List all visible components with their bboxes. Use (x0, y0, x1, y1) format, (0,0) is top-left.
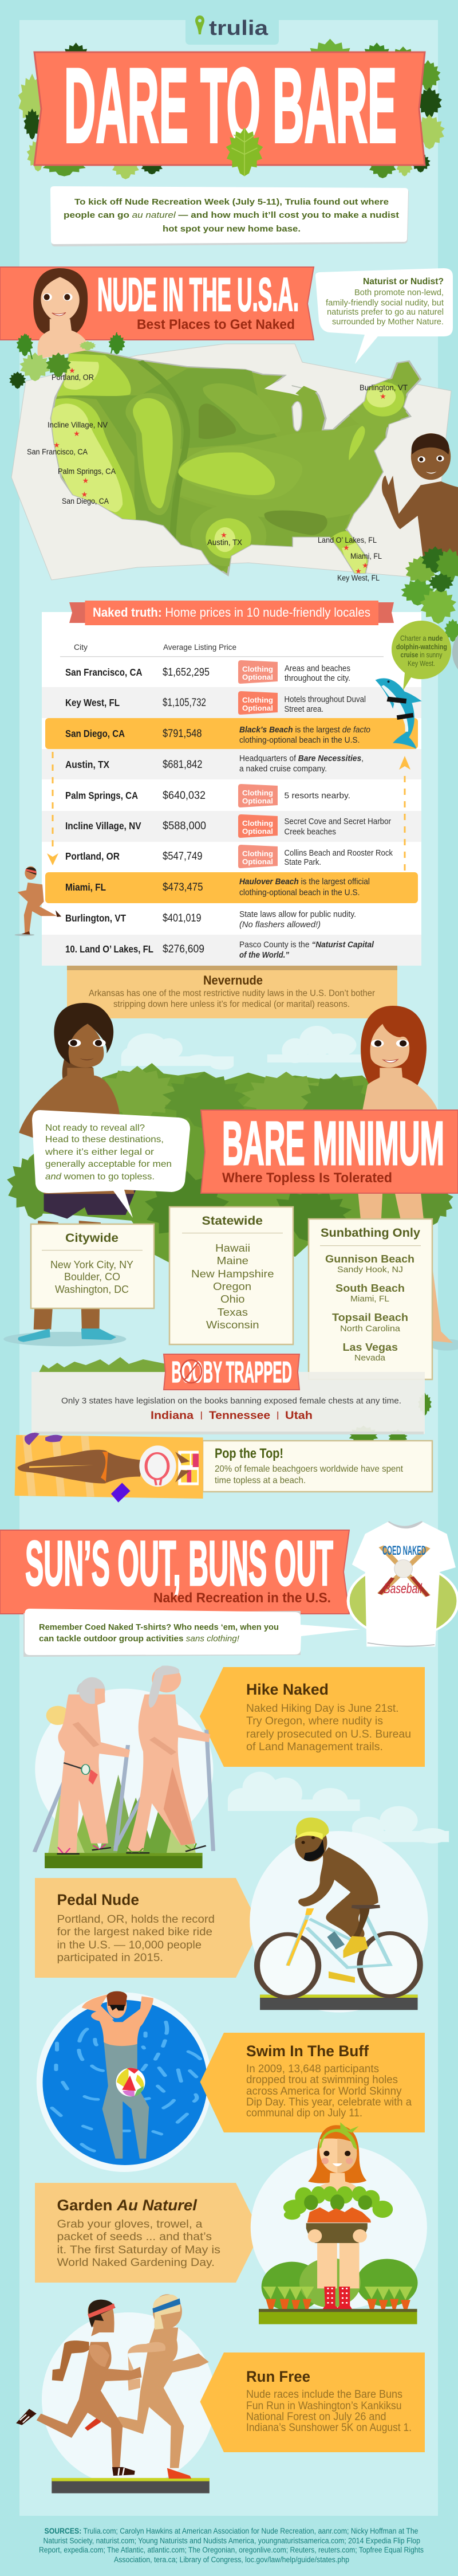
detail column: throughout the city. (285, 674, 350, 683)
speech bubble: dolphin cruise: Key West. (408, 660, 435, 668)
arrow: dashed up (399, 756, 410, 872)
front runner (37, 2342, 141, 2468)
callout: Nevernude: stripping down here unless it’s for medical (or marital) reasons. (113, 999, 350, 1009)
column headers: Average Listing Price (163, 642, 236, 652)
illustration: hikers (34, 1665, 213, 1868)
intro text box: hot spot your new home base. (163, 224, 301, 234)
map labels and stars: Palm Springs, CA (58, 467, 116, 476)
icon: fig leaf (226, 127, 263, 177)
card: Garden Au Naturel: Grab your gloves, trowel, a (57, 2218, 203, 2230)
column headers: City (74, 642, 88, 652)
speech bubble: not ready to reveal all: and women to go topless. (45, 1172, 155, 1182)
illustration: sunbather on towel (15, 1433, 203, 1503)
card: Run Free: National Forest on July 26 and (246, 2411, 386, 2423)
card: Statewide: Statewide (202, 1214, 263, 1228)
clothing optional badges: Optional (242, 704, 273, 712)
card: Run Free: Run Free (246, 2368, 310, 2385)
detail column: State Park. (284, 858, 321, 867)
icon: prohibition sign (181, 1360, 202, 1383)
panel: Booby Trapped: BOOBY TRAPPED (172, 1356, 292, 1389)
title banner (34, 46, 425, 165)
map labels and stars: ★ (355, 567, 362, 575)
clouds (121, 1026, 364, 1070)
title banner leaves (18, 39, 445, 179)
card: Swim In The Buff (200, 2033, 425, 2132)
card: Swim In The Buff: across America for World Skinny (246, 2085, 402, 2097)
detail column: State laws allow for public nudity. (239, 910, 356, 919)
map labels and stars: Austin, TX (207, 538, 242, 547)
speech bubble: coed naked t-shirts: can tackle outdoor group activities sans clothing! (39, 1634, 240, 1644)
character: small runner (15, 866, 61, 936)
greens (283, 2186, 393, 2220)
card: Hike Naked: Naked Hiking Day is June 21st. (246, 1703, 398, 1715)
city and price columns: 10. Land O’ Lakes, FL (65, 943, 153, 955)
clothing optional badges: Optional (242, 827, 273, 836)
card: Pop the Top: 20% of female beachgoers worldwide have spent (215, 1464, 404, 1474)
character: woman with red hair (358, 1006, 458, 1351)
card: Run Free: Indiana’s Sunshower 5K on August 1. (246, 2422, 412, 2434)
card: Garden Au Naturel: Garden Au Naturel (57, 2197, 197, 2214)
card: Statewide: Wisconsin (206, 1319, 259, 1331)
clothing optional badges: Clothing (242, 696, 273, 704)
clothing optional badges: Optional (242, 857, 273, 866)
clothing optional badges: Optional (242, 797, 273, 805)
detail column: clothing-optional beach in the U.S. (239, 888, 360, 897)
card: Garden Au Naturel: World Naked Gardening Day. (57, 2257, 215, 2269)
map labels and stars: ★ (81, 490, 88, 499)
callout: naturist or nudist: naturists prefer to go au naturel (327, 308, 444, 317)
speech bubble: dolphin cruise: cruise in sunny (401, 651, 443, 659)
back runner (108, 2327, 209, 2468)
card: Citywide: Citywide (65, 1232, 119, 1245)
map labels and stars: San Francisco, CA (27, 448, 88, 456)
speech bubble: not ready to reveal all: generally acceptable for men (45, 1159, 172, 1169)
shoulders (315, 2173, 360, 2193)
city and price columns: Key West, FL (65, 697, 120, 708)
beach ball (116, 2068, 145, 2096)
city and price columns (65, 666, 210, 955)
callout: naturist or nudist: surrounded by Mother Nature. (332, 317, 444, 327)
map labels and stars: ★ (220, 531, 227, 539)
sources: Naturist Society, naturist.com; Young Naturists and Nudists America, youngnaturistsamerica.com; 2014 Expedia Flip Flop (44, 2536, 420, 2545)
city and price columns: Palm Springs, CA (65, 790, 138, 801)
card: Statewide (169, 1207, 293, 1344)
legs (317, 2242, 337, 2288)
map labels and stars: Key West, FL (337, 574, 380, 582)
speech bubble: dolphin cruise (392, 621, 458, 691)
subheading: Where Topless Is Tolerated (222, 1170, 392, 1186)
clothing optional badges: Clothing (242, 789, 273, 797)
city and price columns: Austin, TX (65, 759, 109, 770)
card: Garden Au Naturel: packet of seeds ... and that’s (57, 2231, 212, 2243)
section banner: Sun's Out, Buns Out (0, 1528, 349, 1614)
sources (39, 2527, 424, 2564)
city and price columns: $681,842 (163, 759, 203, 771)
map labels and stars: Portland, OR (52, 373, 94, 382)
card: Run Free: Fun Run in Washington’s Kankiksu (246, 2400, 402, 2412)
table: home prices (42, 601, 421, 966)
card: Citywide (31, 1224, 154, 1308)
carrot rows (266, 2299, 410, 2309)
clothing optional badges: Clothing (242, 849, 273, 858)
city and price columns: Miami, FL (65, 881, 106, 893)
scene: clouds and bushes (7, 1026, 453, 1262)
statement: Only 3 states have legislation on the books banning exposed female chests at any time. (61, 1396, 401, 1406)
card: Swim In The Buff: Swim In The Buff (246, 2042, 369, 2060)
intro text box: To kick off Nude Recreation Week (July 5-11), Trulia found out where (74, 197, 389, 207)
intro text box: people can go au naturel — and how much it’ll cost you to make a nudist (64, 210, 399, 220)
card: Sunbathing Only: Topsail Beach (332, 1312, 408, 1323)
detail column: Headquarters of Bare Necessities, (239, 754, 364, 763)
city and price columns: $401,019 (163, 912, 202, 924)
card: Hike Naked: Try Oregon, where nudity is (246, 1715, 383, 1727)
map labels and stars (27, 366, 408, 582)
callout: naturist or nudist: family-friendly social nudity, but (326, 299, 444, 308)
clothing optional badges: Clothing (242, 819, 273, 828)
card: Pop the Top: Pop the Top! (215, 1446, 283, 1461)
basket (306, 2223, 368, 2243)
card: Swim In The Buff: dropped trou at swimming holes (246, 2074, 398, 2086)
detail column: Collins Beach and Rooster Rock (284, 849, 393, 858)
swimmer (102, 2040, 149, 2159)
card: Pedal Nude (35, 1878, 260, 1978)
city and price columns: $473,475 (163, 881, 203, 893)
card: Pedal Nude: participated in 2015. (57, 1952, 163, 1964)
column headers (60, 642, 384, 657)
speech bubble: not ready to reveal all: Head to these destinations, (45, 1135, 164, 1144)
speech bubble: not ready to reveal all: where it’s either legal or (45, 1147, 155, 1157)
wordmark: trulia (209, 16, 269, 40)
map labels and stars: ★ (69, 366, 76, 375)
card: Pedal Nude: in the U.S. — 10,000 people (57, 1939, 202, 1951)
row backgrounds (42, 687, 421, 966)
card: Statewide: Hawaii (215, 1242, 250, 1254)
card: Garden Au Naturel (35, 2183, 260, 2283)
city and price columns: Incline Village, NV (65, 820, 141, 832)
t-shirt lettering (382, 1543, 426, 1597)
panel: Booby Trapped (31, 1354, 432, 1445)
detail column: Street area. (284, 705, 323, 714)
card: Swim In The Buff: Dip Day. This year, celebrate with a (246, 2096, 412, 2108)
card: Run Free: Nude races include the Bare Buns (246, 2389, 402, 2401)
map labels and stars: ★ (53, 441, 60, 449)
detail column: a naked cruise company. (239, 764, 327, 774)
detail column (239, 664, 393, 960)
city and price columns: $791,548 (163, 728, 202, 740)
city and price columns: $276,609 (163, 943, 204, 955)
panel: Booby Trapped: Utah (285, 1410, 313, 1422)
card: Pedal Nude: for the largest naked bike ride (57, 1926, 212, 1938)
character: woman with leaves (9, 268, 125, 389)
speech bubble: not ready to reveal all (32, 1110, 190, 1218)
card: Sunbathing Only: North Carolina (340, 1324, 401, 1334)
clothing optional badges: Optional (242, 673, 273, 681)
section banner: Bare Minimum (201, 1108, 458, 1193)
city and price columns: $547,749 (163, 850, 203, 862)
table ribbon (69, 601, 394, 625)
clothing optional badges: Clothing (242, 665, 273, 673)
detail column: Black’s Beach is the largest de facto (239, 726, 370, 735)
city and price columns: $640,032 (163, 790, 206, 802)
subheading: Naked Recreation in the U.S. (153, 1590, 331, 1606)
callout: naturist or nudist: Naturist or Nudist? (363, 277, 444, 287)
water ripples (52, 2022, 200, 2151)
card: Citywide: Washington, DC (55, 1284, 129, 1295)
illustration: runners (16, 2294, 215, 2493)
callout: Nevernude: Nevernude (203, 973, 263, 987)
character: man waving peace sign (382, 433, 458, 586)
table ribbon: Naked truth: Home prices in 10 nude-friendly locales (93, 605, 370, 620)
clouds near cyclist (228, 1772, 449, 1844)
ribbon (164, 1354, 299, 1390)
map labels and stars: ★ (362, 561, 369, 570)
city and price columns: $1,652,295 (163, 666, 210, 679)
sources: SOURCES: Trulia.com; Carolyn Hawkins at American Association for Nude Recreation, aanr.com; Nicky Hoffman at The (45, 2527, 418, 2535)
section banner: Nude in the U.S.A. (0, 267, 314, 340)
map paper background (11, 344, 451, 580)
city and price columns: $1,105,732 (163, 697, 206, 709)
card: Statewide: Oregon (213, 1281, 251, 1292)
card: Sunbathing Only: South Beach (335, 1283, 405, 1294)
detail column: Secret Cove and Secret Harbor (284, 817, 391, 826)
map labels and stars: ★ (343, 543, 350, 552)
speech bubble: not ready to reveal all: Not ready to reveal all? (45, 1123, 145, 1133)
card: Statewide: New Hampshire (191, 1268, 274, 1280)
detail column: of the World.” (239, 951, 290, 960)
card: Statewide: Maine (216, 1255, 248, 1267)
detail column: (No flashers allowed!) (239, 920, 321, 930)
illustration: floating swimmer in pool (37, 1991, 212, 2172)
illustration: gardener with carrots (251, 2122, 427, 2324)
map labels and stars: ★ (73, 429, 80, 438)
map of the U.S. with contour zones (50, 348, 421, 575)
character: woman with dark hair (3, 1003, 136, 1346)
leaves below panel (349, 1393, 432, 1445)
card: Statewide: Ohio (220, 1293, 245, 1305)
palm leaves over table corner (401, 573, 458, 642)
arrow: dashed down (47, 752, 58, 865)
speech bubble: dolphin cruise: dolphin-watching (396, 643, 447, 651)
state list: Indiana (151, 1410, 194, 1422)
speech bubble: coed naked t-shirts (23, 1609, 361, 1657)
card: Sunbathing Only: Sandy Hook, NJ (337, 1265, 403, 1275)
card: Pedal Nude: Portland, OR, holds the record (57, 1914, 215, 1926)
speech bubble: dolphin cruise: Charter a nude (400, 634, 443, 642)
card: Run Free (200, 2352, 425, 2452)
card: Garden Au Naturel: it. The first Saturday of May is (57, 2244, 220, 2256)
callout: naturist or nudist: Both promote non-lewd, (354, 288, 444, 297)
card: Hike Naked: of Land Management trails. (246, 1741, 383, 1753)
detail column: Creek beaches (284, 828, 336, 837)
card: Sunbathing Only: Miami, FL (350, 1294, 389, 1304)
card: Citywide: Boulder, CO (64, 1271, 120, 1283)
card: Swim In The Buff: In 2009, 13,648 participants (246, 2063, 379, 2075)
map labels and stars: ★ (82, 476, 89, 485)
detail column: Hotels throughout Duval (284, 695, 366, 704)
card: Pop the Top (203, 1441, 432, 1492)
head (308, 2125, 366, 2183)
detail column: 5 resorts nearby. (284, 791, 350, 801)
map labels and stars: Burlington, VT (360, 383, 408, 392)
illustration: cyclist (250, 1817, 428, 2013)
t-shirt lettering: Baseball (384, 1581, 422, 1597)
detail column: clothing-optional beach in the U.S. (239, 736, 360, 745)
city and price columns: $588,000 (163, 820, 206, 832)
grass (39, 1357, 166, 1373)
city and price columns: San Diego, CA (65, 728, 125, 739)
card: Sunbathing Only: Las Vegas (342, 1342, 398, 1353)
callout: Nevernude: Arkansas has one of the most restrictive nudity laws in the U.S. Don’t bother (89, 989, 375, 998)
card: Sunbathing Only: Sunbathing Only (321, 1226, 420, 1240)
callout: Nevernude (67, 966, 397, 1018)
logo: trulia (185, 15, 279, 45)
clothing optional badges (238, 660, 278, 868)
map labels and stars: Miami, FL (350, 552, 382, 560)
map labels and stars: Land O’ Lakes, FL (318, 536, 377, 544)
card: Hike Naked (200, 1667, 425, 1767)
city and price columns: Burlington, VT (65, 912, 126, 924)
city and price columns: San Francisco, CA (65, 666, 143, 678)
carrots in basket (307, 2208, 371, 2222)
detail column: Areas and beaches (285, 664, 350, 673)
card: Hike Naked: rarely prosecuted on U.S. Bureau (246, 1728, 411, 1740)
illustration: coed naked t-shirt (348, 1522, 458, 1646)
panel: Booby Trapped: Tennessee (209, 1410, 270, 1422)
card: Pedal Nude: Pedal Nude (57, 1891, 139, 1908)
city and price columns: Portland, OR (65, 850, 120, 862)
card: Hike Naked: Hike Naked (246, 1681, 329, 1698)
sources: Association, tera.ca; Library of Congress, loc.gov/law/help/guide/states.php (114, 2555, 349, 2564)
speech bubble: coed naked t-shirts: Remember Coed Naked T-shirts? Who needs ‘em, when you (39, 1622, 279, 1632)
card: Pop the Top: time topless at a beach. (215, 1476, 306, 1485)
map labels and stars: San Diego, CA (62, 497, 109, 505)
icon: dolphin (376, 678, 422, 749)
subheading: Best Places to Get Naked (137, 317, 295, 332)
bush mass (13, 1063, 450, 1262)
map labels and stars: ★ (380, 392, 386, 401)
card: Swim In The Buff: communal dip on July 11. (246, 2107, 362, 2119)
boots (323, 2287, 339, 2309)
card: Citywide: New York City, NY (50, 1259, 133, 1271)
card: Sunbathing Only: Gunnison Beach (325, 1253, 414, 1265)
sources: Report, expedia.com; The Atlantic, atlantic.com; The Oregonian, oregonlive.com; Reuters, reuters.com; Topfree Equal Rights (39, 2546, 424, 2554)
map labels and stars: Incline Village, NV (48, 421, 108, 429)
icon: map pin (195, 15, 204, 34)
card: Sunbathing Only: Nevada (354, 1353, 386, 1363)
detail column: Haulover Beach is the largest official (239, 877, 370, 887)
ground (259, 2309, 417, 2324)
intro text box (50, 186, 409, 246)
detail column: Pasco County is the “Naturist Capital (239, 940, 374, 950)
card: Sunbathing Only (309, 1219, 432, 1379)
card: Statewide: Texas (218, 1307, 248, 1318)
callout: naturist or nudist (315, 268, 453, 364)
